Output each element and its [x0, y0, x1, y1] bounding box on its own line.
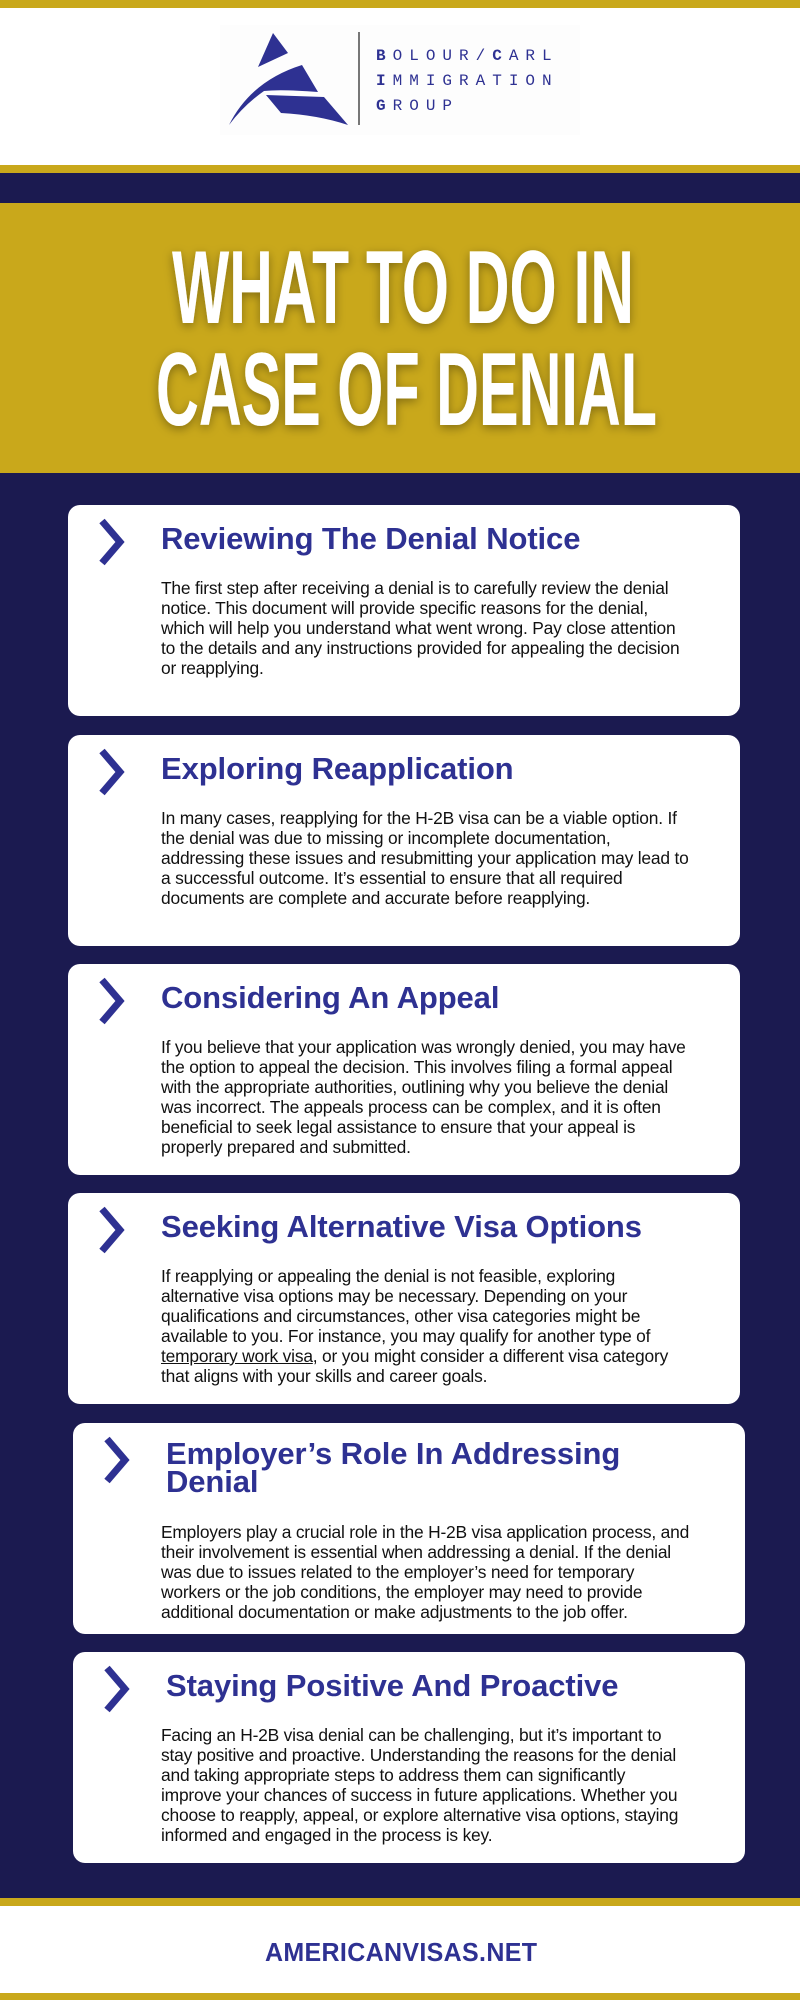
text: workers or the job conditions, the employer may need to provide	[161, 1582, 642, 1602]
heading	[166, 1436, 620, 1499]
text: additional documentation or make adjustments to the job offer.	[161, 1602, 628, 1622]
heading: Exploring Reapplication	[161, 751, 514, 786]
logo text: BOLOUR/CARL	[376, 47, 559, 65]
text: Facing an H-2B visa denial can be challenging, but it’s important to	[161, 1725, 661, 1745]
text	[161, 1522, 689, 1622]
icon: chevron	[99, 518, 124, 566]
card: employer	[73, 1423, 745, 1634]
header band	[0, 0, 800, 203]
text: notice. This document will provide specific reasons for the denial,	[161, 598, 648, 618]
text: If you believe that your application was wrongly denied, you may have	[161, 1037, 686, 1057]
text: with the appropriate authorities, outlining why you believe the denial	[161, 1077, 668, 1097]
text	[161, 808, 689, 908]
text: their involvement is essential when addressing a denial. If the denial	[161, 1542, 671, 1562]
text: improve your chances of success in future applications. Whether you	[161, 1785, 677, 1805]
text	[161, 1266, 668, 1386]
heading: Considering An Appeal	[161, 980, 499, 1015]
text: informed and engaged in the process is key.	[161, 1825, 492, 1845]
text: to the details and any instructions provided for appealing the decision	[161, 638, 680, 658]
heading: Staying Positive And Proactive	[166, 1668, 618, 1703]
text: which will help you understand what went wrong. Pay close attention	[161, 618, 675, 638]
icon: chevron	[104, 1436, 130, 1484]
logo text	[376, 47, 559, 115]
heading: Employer’s Role In Addressing	[166, 1436, 620, 1471]
title band	[0, 203, 800, 473]
logo text: GROUP	[376, 97, 459, 115]
text: The first step after receiving a denial is to carefully review the denial	[161, 578, 668, 598]
card: appeal	[68, 964, 740, 1175]
card: reapplication	[68, 735, 740, 946]
text	[161, 1037, 686, 1157]
text: alternative visa options may be necessary. Depending on your	[161, 1286, 627, 1306]
text: and taking appropriate steps to address them can significantly	[161, 1765, 625, 1785]
card: reviewing	[68, 505, 740, 716]
text: or reapplying.	[161, 658, 264, 678]
text: a successful outcome. It’s essential to ensure that all required	[161, 868, 623, 888]
icon: chevron	[104, 1666, 130, 1712]
footer	[0, 1898, 800, 2000]
text: temporary work visa, or you might consider a different visa category	[161, 1346, 668, 1366]
card: alternatives	[68, 1193, 740, 1404]
footer url: AMERICANVISAS.NET	[265, 1938, 537, 1967]
text: was incorrect. The appeals process can be complex, and it is often	[161, 1097, 661, 1117]
text: properly prepared and submitted.	[161, 1137, 411, 1157]
icon: logo mark	[229, 33, 348, 125]
text: stay positive and proactive. Understanding the reasons for the denial	[161, 1745, 676, 1765]
icon: chevron	[99, 748, 124, 796]
text: documents are complete and accurate before reapplying.	[161, 888, 590, 908]
text: If reapplying or appealing the denial is not feasible, exploring	[161, 1266, 615, 1286]
text: choose to reapply, appeal, or explore alternative visa options, staying	[161, 1805, 678, 1825]
title	[153, 230, 660, 448]
text: the denial was due to missing or incomplete documentation,	[161, 828, 611, 848]
heading: Seeking Alternative Visa Options	[161, 1209, 642, 1244]
text	[161, 578, 680, 678]
text: addressing these issues and resubmitting your application may lead to	[161, 848, 689, 868]
logo text: IMMIGRATION	[376, 72, 559, 90]
text: qualifications and circumstances, other visa categories might be	[161, 1306, 640, 1326]
text: the option to appeal the decision. This involves filing a formal appeal	[161, 1057, 672, 1077]
heading: Denial	[166, 1464, 258, 1499]
text	[161, 1725, 678, 1845]
text: available to you. For instance, you may qualify for another type of	[161, 1326, 650, 1346]
card: positive	[73, 1652, 745, 1863]
text: that aligns with your skills and career goals.	[161, 1366, 487, 1386]
icon: chevron	[99, 978, 124, 1024]
text: beneficial to seek legal assistance to ensure that your appeal is	[161, 1117, 635, 1137]
icon: chevron	[99, 1206, 124, 1254]
text: In many cases, reapplying for the H-2B visa can be a viable option. If	[161, 808, 677, 828]
text: Employers play a crucial role in the H-2B visa application process, and	[161, 1522, 689, 1542]
logo	[220, 25, 580, 135]
text: was due to issues related to the employer’s need for temporary	[161, 1562, 634, 1582]
heading: Reviewing The Denial Notice	[161, 521, 580, 556]
